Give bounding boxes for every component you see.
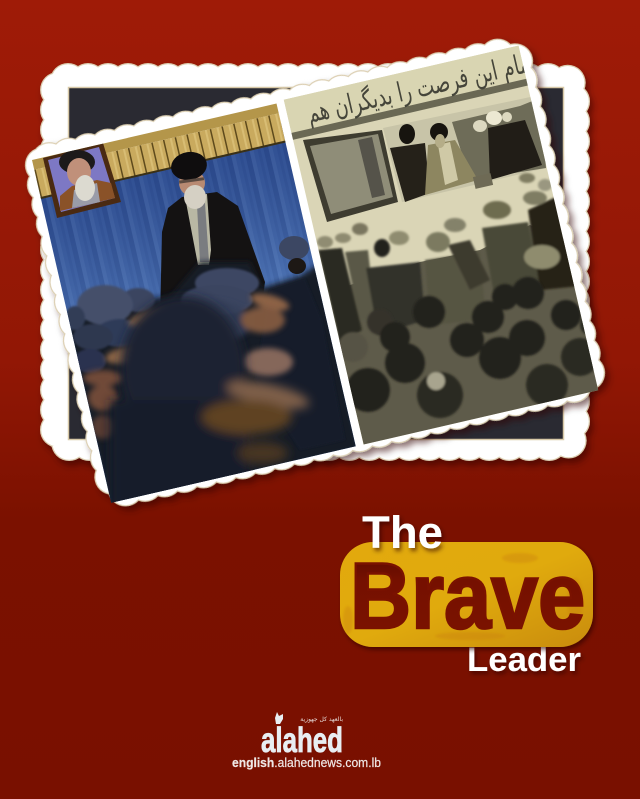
right officer cap (279, 236, 309, 274)
panel: front photo card (40, 53, 589, 491)
blurred officers and caps (66, 267, 300, 374)
blurred crowd base (66, 262, 360, 510)
panel: back photo card (58, 81, 572, 443)
title: Leader: Leader (467, 641, 581, 679)
standing officers in caps (317, 173, 590, 345)
right photo: archive photo of Imam addressing officers (270, 40, 610, 450)
website url: english.alahednews.com.lb (232, 756, 381, 770)
left photo: leader facing saluting officers (32, 104, 356, 503)
framed portrait (43, 143, 121, 218)
crowd bodies underlay (335, 225, 605, 450)
title badge: Brave (340, 542, 593, 648)
icon: flame bird (275, 712, 283, 724)
blue curtain (36, 123, 356, 503)
Persian banner text: مام این فرصت را بدیگران هم (304, 48, 532, 129)
title: The: The (362, 507, 443, 558)
sepia wall (270, 40, 610, 450)
crowd of heads (338, 277, 600, 418)
Brave word: Brave (350, 543, 585, 648)
logo: alahed (232, 712, 381, 770)
leader figure (160, 152, 265, 302)
soft hands (83, 290, 293, 439)
badge texture (343, 553, 583, 640)
gold panelled wall (32, 104, 286, 199)
blurred foreground officer (110, 296, 311, 510)
centre window with speakers (383, 95, 546, 202)
left window (303, 130, 398, 222)
logo wordmark: alahed (261, 721, 343, 760)
logo tagline: بالعهد كل جهوزية (300, 716, 343, 723)
